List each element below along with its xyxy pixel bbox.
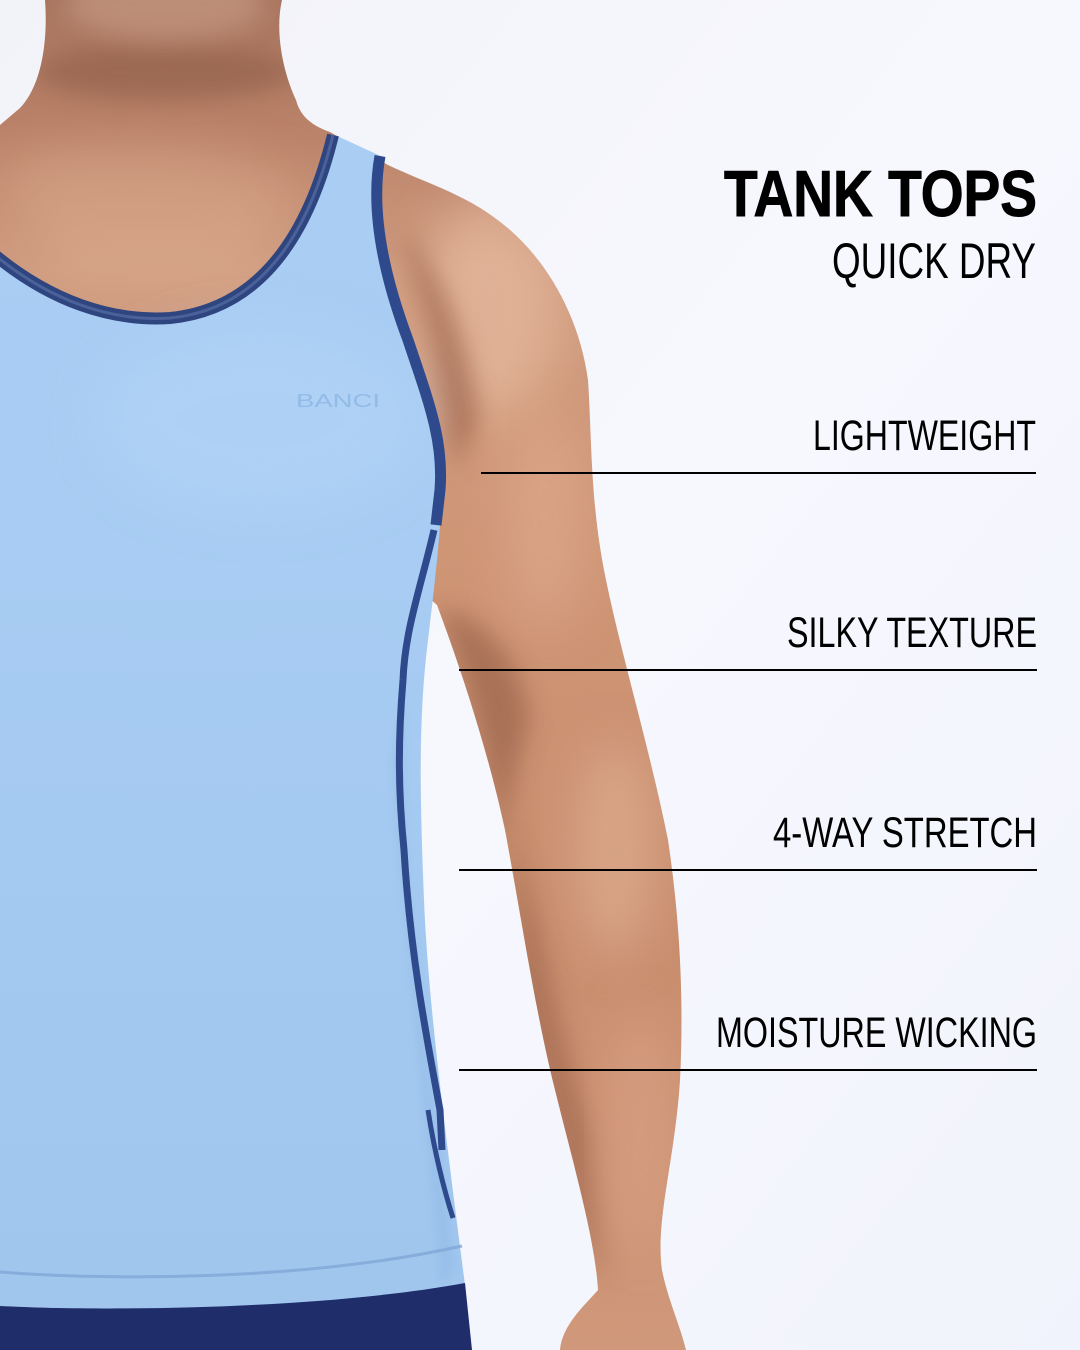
chest highlight: [20, 146, 274, 258]
forearm inner shadow: [511, 860, 608, 1266]
tank side shading: [392, 700, 455, 1285]
underarm shadow: [400, 230, 478, 470]
forearm highlight: [575, 740, 655, 960]
neckline trim: [0, 135, 333, 318]
model photo illustration: [0, 0, 700, 1350]
neckline trim highlight: [0, 135, 333, 318]
hem stitch: [0, 1246, 462, 1277]
inner elbow shadow: [437, 605, 530, 860]
lower seam trim: [428, 1110, 453, 1218]
logo on chest: BANCI: [296, 391, 380, 411]
chin: [65, 0, 265, 40]
tank highlight: [100, 330, 420, 510]
navy shorts: [0, 1283, 472, 1350]
tank top body: [0, 135, 465, 1310]
chin shadow: [35, 44, 295, 100]
upper arm highlight: [508, 440, 582, 610]
shoulder highlight: [420, 200, 560, 420]
armhole trim: [377, 156, 441, 525]
side seam trim: [399, 530, 442, 1150]
skin: neck, chest and arm: [0, 0, 700, 1350]
wrist highlight: [621, 1051, 671, 1198]
